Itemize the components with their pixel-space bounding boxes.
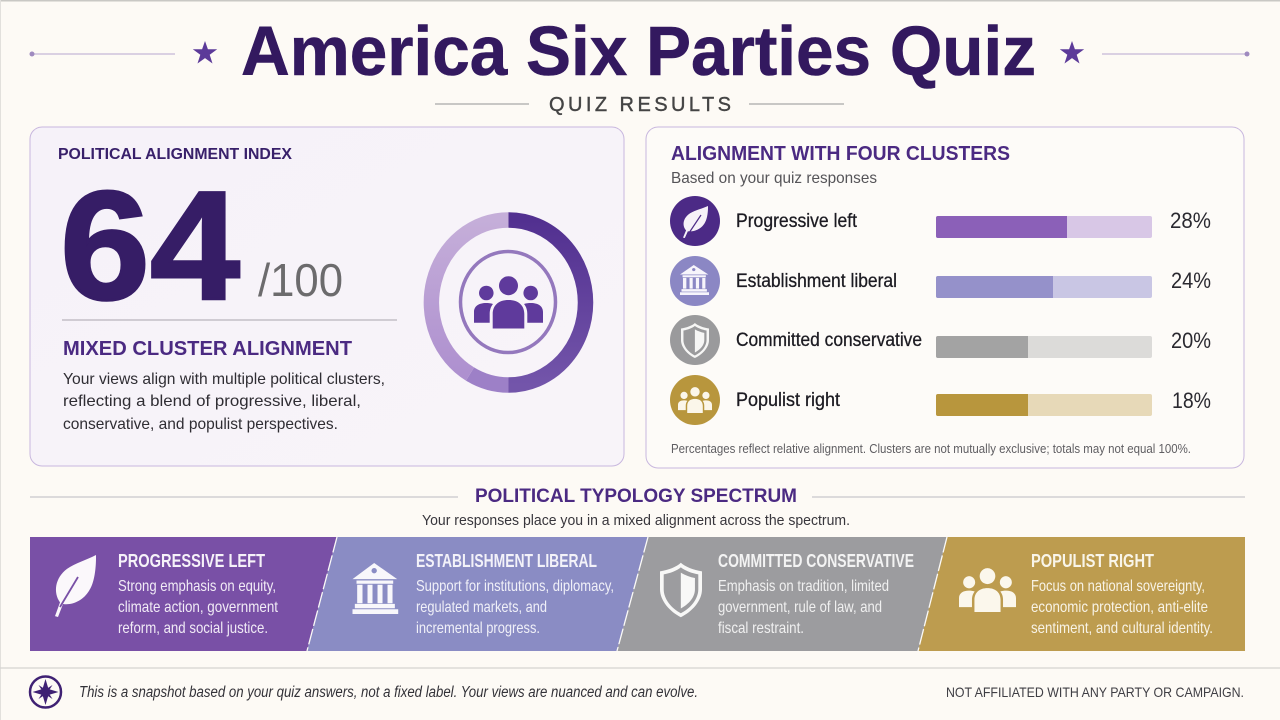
- row: committed conservative: [670, 315, 1211, 365]
- row: establishment liberal: Establishment liberal: [736, 270, 897, 292]
- footer: [0, 668, 1280, 708]
- icon: people: [959, 568, 1016, 612]
- segment: establishment liberal: incremental progress.: [416, 620, 540, 637]
- footnote: Percentages reflect relative alignment. Clusters are not mutually exclusive; totals may not equal 100%.: [671, 442, 1191, 456]
- segment: establishment liberal: [307, 537, 648, 651]
- title: America Six Parties Quiz: [241, 12, 1036, 90]
- disclaimer: NOT AFFILIATED WITH ANY PARTY OR CAMPAIGN.: [946, 684, 1244, 700]
- segment: populist right: POPULIST RIGHT: [1031, 551, 1154, 571]
- icon: people: [474, 276, 543, 328]
- row: populist right: 18%: [1172, 388, 1211, 413]
- result description: Your views align with multiple political clusters,: [63, 371, 385, 388]
- row: progressive left: [670, 196, 1211, 246]
- panel: alignment with four clusters: [646, 127, 1244, 468]
- donut chart: [431, 220, 586, 385]
- segment: committed conservative: [617, 537, 947, 651]
- row: committed conservative: 20%: [1171, 328, 1211, 353]
- score denominator: /100: [258, 254, 343, 306]
- panel subheading: Based on your quiz responses: [671, 170, 877, 187]
- icon: shield: [660, 563, 702, 617]
- result heading: MIXED CLUSTER ALIGNMENT: [63, 338, 352, 360]
- segment: populist right: [918, 537, 1245, 651]
- section subheading: Your responses place you in a mixed alignment across the spectrum.: [422, 512, 850, 529]
- segment: populist right: Focus on national sovereignty,: [1031, 578, 1205, 595]
- icon: compass star: [30, 676, 61, 708]
- icon: institution: [352, 563, 398, 614]
- result description: [63, 371, 385, 433]
- segment: progressive left: climate action, government: [118, 599, 278, 616]
- segment: committed conservative: government, rule of law, and: [718, 599, 882, 616]
- panel heading: POLITICAL ALIGNMENT INDEX: [58, 146, 292, 163]
- right header ornament: [1060, 41, 1250, 64]
- segment: progressive left: Strong emphasis on equity,: [118, 578, 276, 595]
- subtitle: QUIZ RESULTS: [549, 94, 731, 116]
- segment: progressive left: [30, 537, 337, 651]
- row: progressive left: Progressive left: [736, 210, 858, 232]
- segment: committed conservative: COMMITTED CONSERVATIVE: [718, 551, 914, 571]
- footer note: This is a snapshot based on your quiz answers, not a fixed label. Your views are nuanced and can evolve.: [79, 684, 698, 701]
- panel heading: ALIGNMENT WITH FOUR CLUSTERS: [671, 143, 1010, 165]
- icon: leaf: [55, 555, 96, 617]
- left header ornament: [30, 41, 217, 64]
- spectrum band: [30, 537, 1245, 651]
- row: establishment liberal: [670, 256, 1211, 306]
- row: populist right: [670, 375, 1211, 425]
- row: progressive left: 28%: [1170, 208, 1211, 233]
- segment: establishment liberal: Support for institutions, diplomacy,: [416, 578, 614, 595]
- segment: establishment liberal: regulated markets, and: [416, 599, 547, 616]
- result description: conservative, and populist perspectives.: [63, 416, 338, 433]
- segment: populist right: economic protection, anti-elite: [1031, 599, 1208, 616]
- segment: committed conservative: fiscal restraint.: [718, 620, 804, 637]
- panel: political alignment index: [30, 127, 624, 466]
- row: committed conservative: Committed conservative: [736, 329, 922, 351]
- segment: progressive left: PROGRESSIVE LEFT: [118, 551, 265, 571]
- row: populist right: Populist right: [736, 389, 841, 411]
- segment: populist right: sentiment, and cultural identity.: [1031, 620, 1213, 637]
- header: [30, 12, 1250, 116]
- row: establishment liberal: 24%: [1171, 268, 1211, 293]
- result description: reflecting a blend of progressive, liberal,: [63, 393, 361, 410]
- segment: establishment liberal: ESTABLISHMENT LIBERAL: [416, 551, 597, 571]
- section heading: political typology spectrum: POLITICAL TYPOLOGY SPECTRUM: [475, 485, 797, 507]
- score: 64: [60, 159, 240, 332]
- section heading: political typology spectrum: [30, 485, 1245, 529]
- segment: committed conservative: Emphasis on tradition, limited: [718, 578, 889, 595]
- segment: progressive left: reform, and social justice.: [118, 620, 268, 637]
